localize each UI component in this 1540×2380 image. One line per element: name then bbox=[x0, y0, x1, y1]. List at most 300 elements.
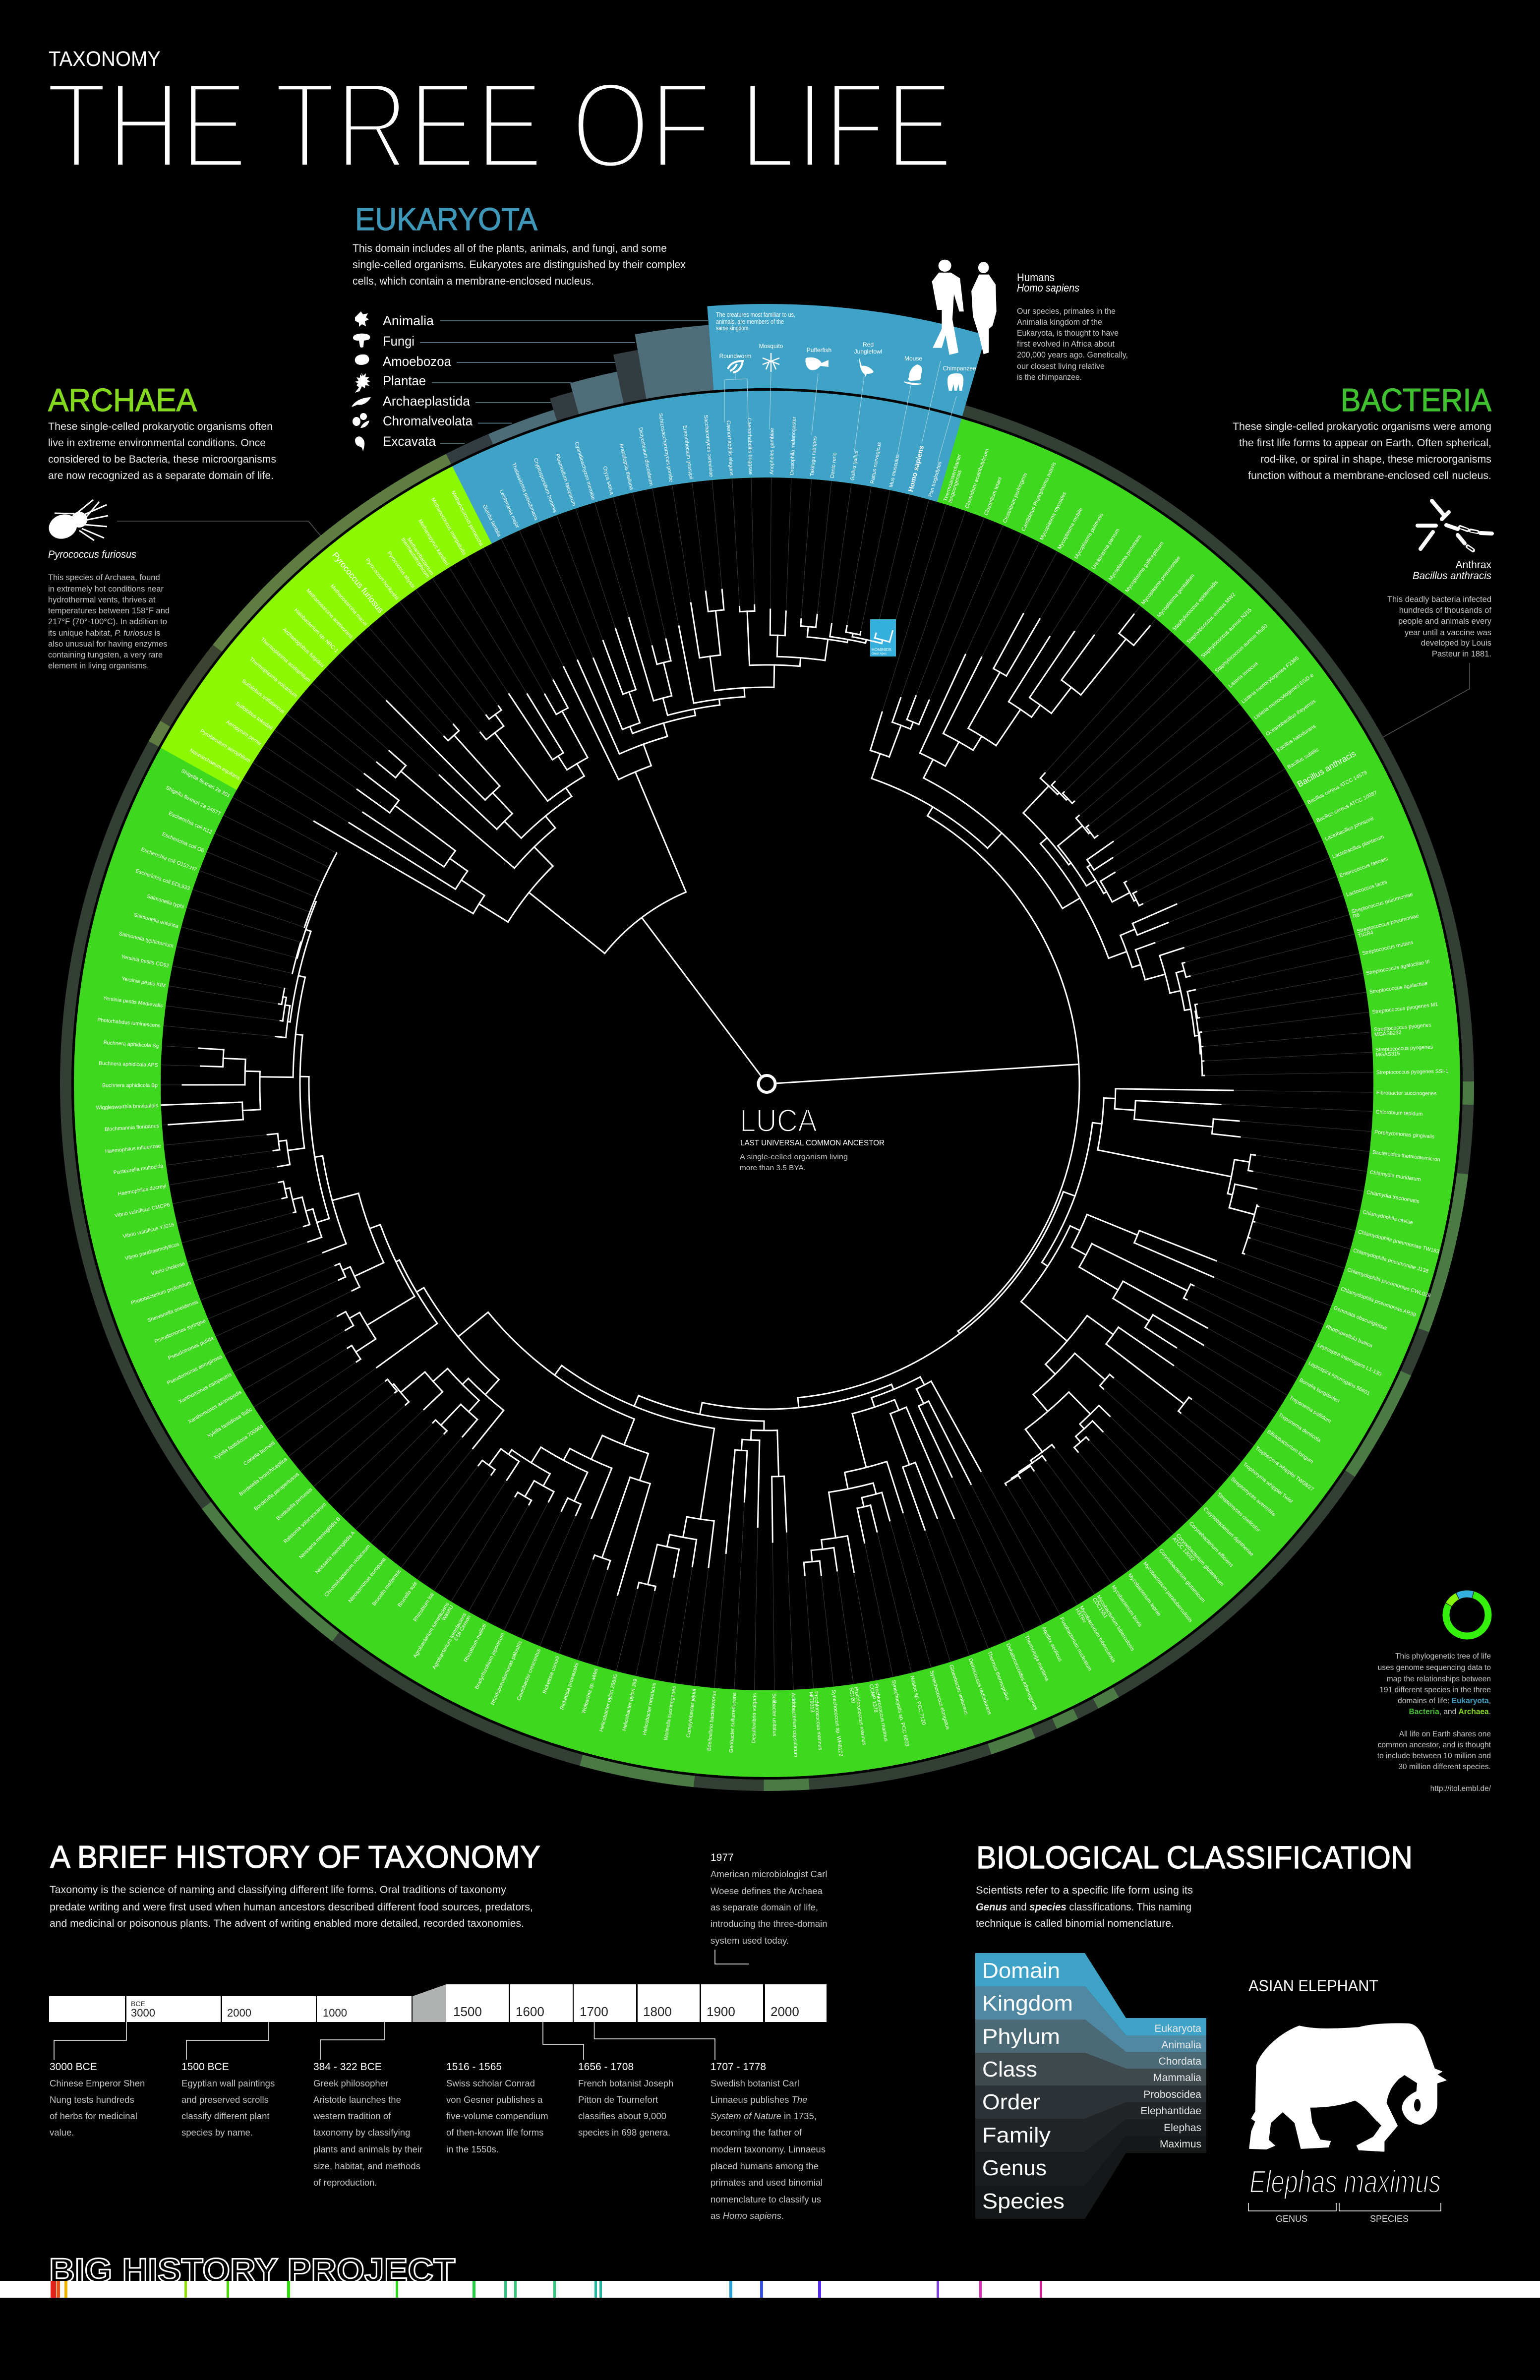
species labels: Listeria monocytogenes F2365 bbox=[1241, 655, 1300, 705]
species labels: Corynebacterium efficiens bbox=[1188, 1521, 1234, 1568]
text: Humans description: is the chimpanzee. bbox=[1017, 372, 1082, 382]
species labels: Treponema pallidum bbox=[1288, 1395, 1332, 1425]
heading: Eukaryota: EUKARYOTA bbox=[355, 201, 537, 237]
event: 1977: introducing the three-domain bbox=[711, 1918, 828, 1929]
species labels: Bacillus cereus ATCC 10987 bbox=[1315, 789, 1378, 824]
icon: Plantae bbox=[355, 372, 370, 393]
event: 1656-1708 bbox=[578, 2061, 673, 2138]
species labels: Bdellovibrio bacteriovorus bbox=[706, 1691, 717, 1751]
species labels: Methanococcus maripaludis bbox=[430, 497, 467, 556]
species labels: Mycobacterium leprae bbox=[1126, 1572, 1162, 1617]
text: Bacteria description: rod-like, or spiral in shape, these microorganisms bbox=[1260, 453, 1491, 465]
event: 384-322 BCE: size, habitat, and methods bbox=[313, 2161, 420, 2171]
species labels: Corynebacterium diphtheriae bbox=[1202, 1506, 1255, 1557]
species labels: Candidatus Phytoplasma asteris bbox=[1020, 461, 1058, 532]
elephant classification labels: Eukaryota bbox=[1154, 2023, 1201, 2034]
text: Pyrococcus description: in extremely hot conditions near bbox=[48, 585, 164, 594]
text: Humans: Humans bbox=[1017, 271, 1055, 284]
species labels: Methanococcus jannaschii bbox=[450, 490, 484, 547]
classification rank labels: Class bbox=[982, 2057, 1037, 2082]
species labels: Wigglesworthia brevipalpis bbox=[96, 1103, 158, 1111]
species labels: Lactobacillus plantarum bbox=[1331, 833, 1385, 860]
text: Anthrax name bbox=[1413, 559, 1491, 582]
event: 1977: 1977 bbox=[711, 1852, 734, 1863]
species labels: Eremothecium gossypii bbox=[682, 425, 694, 479]
leader line: Anthrax bbox=[1373, 663, 1470, 743]
text: history intro: predate writing and were first used when human ancestors described different food sources, predators, bbox=[50, 1901, 533, 1913]
icon: LUCA node bbox=[759, 1075, 775, 1092]
classification rank labels: Domain bbox=[982, 1959, 1060, 1983]
event: 1500 BCE: and preserved scrolls bbox=[181, 2094, 269, 2105]
animal labels: Mouse bbox=[904, 355, 922, 362]
species labels: Listeria monocytogenes EGD-e bbox=[1253, 672, 1315, 721]
species labels: Buchnera aphidicola APS bbox=[99, 1061, 158, 1068]
species labels: Salmonella typhimurium bbox=[118, 931, 174, 949]
species labels: Listeria innocua bbox=[1227, 660, 1259, 689]
species labels: Oceanobacillus iheyensis bbox=[1265, 698, 1317, 737]
text: Asian elephant: ASIAN ELEPHANT bbox=[1248, 1977, 1378, 1995]
event: 1977: Woese defines the Archaea bbox=[711, 1886, 823, 1896]
legend labels: Animalia bbox=[383, 313, 434, 328]
species labels: Archaeoglobus fulgidus bbox=[282, 627, 325, 668]
text: classification intro: Genus and species classifications. This naming bbox=[976, 1902, 1191, 1913]
species labels: Mycoplasma genitalium bbox=[1156, 573, 1196, 619]
event: 1516-1565: Swiss scholar Conrad bbox=[446, 2078, 535, 2088]
text: Animalia note: The creatures most familiar to us, bbox=[716, 311, 795, 318]
species labels: Vibrio parahaemolyticus bbox=[124, 1241, 180, 1262]
text: Anthrax description: developed by Louis bbox=[1421, 639, 1491, 648]
species labels: Corynebacterium glutamicum bbox=[1175, 1533, 1225, 1588]
species labels: Chlamydia trachomatis bbox=[1366, 1190, 1420, 1205]
text: history intro: and medicinal or poisonous plants. The advent of writing enabled more detailed, recorded taxonomies. bbox=[50, 1917, 524, 1929]
icon: mosquito bbox=[763, 353, 779, 372]
text: Humans: Homo sapiens bbox=[1017, 282, 1079, 294]
species labels: Bacillus subtilis bbox=[1287, 747, 1320, 770]
species labels: Streptomyces coelicolor bbox=[1216, 1491, 1261, 1534]
species labels: Saccharomyces cerevisiae bbox=[703, 415, 714, 477]
species labels: Schizosaccharomyces pombe bbox=[657, 413, 674, 482]
text: tree note bbox=[1377, 1652, 1491, 1793]
text: Pyrococcus description: also unusual for having enzymes bbox=[48, 640, 167, 649]
chart: classification ribbons bbox=[975, 1953, 1206, 2219]
species labels: Thermotoga maritima bbox=[1023, 1634, 1050, 1682]
text: Eukaryota description: single-celled organisms. Eukaryotes are distinguished by their complex bbox=[353, 258, 686, 271]
event: 1516-1565 bbox=[446, 2061, 548, 2154]
text: LUCA block bbox=[740, 1103, 885, 1172]
species labels: Synechococcus elongatus bbox=[929, 1670, 951, 1730]
species labels: Porphyromonas gingivalis bbox=[1374, 1129, 1435, 1140]
text: Archaea description bbox=[48, 420, 276, 481]
classification rank labels: Kingdom bbox=[982, 1991, 1073, 2016]
event: 384-322 BCE: of reproduction. bbox=[313, 2177, 377, 2188]
species labels: Yersinia pestis KIM bbox=[121, 976, 166, 989]
species labels: Giardia lamblia bbox=[481, 504, 502, 538]
event: 384-322 BCE bbox=[313, 2061, 422, 2188]
animal labels bbox=[719, 341, 976, 372]
icon: human silhouettes bbox=[932, 260, 997, 355]
species labels: Streptococcus pneumoniae bbox=[1351, 892, 1414, 915]
animal labels: Roundworm bbox=[719, 353, 751, 359]
timeline scale break bbox=[413, 1984, 446, 2022]
species labels: Mycoplasma mycoides bbox=[1039, 491, 1068, 541]
species labels: H37Rv bbox=[1074, 1607, 1087, 1624]
animal labels: Red bbox=[863, 341, 874, 348]
text: Pyrococcus description bbox=[48, 573, 170, 670]
species labels: Mycobacterium paratuberculosis bbox=[1142, 1560, 1193, 1624]
species labels: Photobacterium profundum bbox=[130, 1280, 192, 1306]
text: Pyrococcus description: This species of Archaea, found bbox=[48, 573, 160, 582]
tree branches bbox=[162, 590, 1259, 1595]
species labels: CCMP 1378 bbox=[868, 1684, 879, 1713]
icon: Amoebozoa bbox=[355, 355, 369, 365]
species labels: Streptococcus agalactiae III bbox=[1366, 958, 1430, 976]
text: Humans description: our closest living relative bbox=[1017, 361, 1105, 371]
species labels: Thermoplasma volcanium bbox=[248, 656, 298, 699]
timeline year labels: 1500 bbox=[453, 2004, 482, 2019]
event: 384-322 BCE: Aristotle launches the bbox=[313, 2094, 401, 2105]
event: 1707-1778: 1707 - 1778 bbox=[711, 2061, 766, 2073]
event: 1656-1708: French botanist Joseph bbox=[578, 2078, 673, 2088]
species tip guide lines bbox=[161, 477, 1373, 1690]
species labels: Prochlorococcus marinus bbox=[873, 1683, 889, 1742]
species labels: Drosophila melanogaster bbox=[789, 416, 797, 475]
species labels: Buchnera aphidicola Bp bbox=[102, 1082, 158, 1088]
event: 3000 BCE: value. bbox=[50, 2127, 74, 2138]
binomial brackets bbox=[1248, 2203, 1441, 2211]
text: Humans bbox=[1017, 271, 1079, 294]
species labels: Bacillus cereus ATCC 14579 bbox=[1306, 770, 1368, 806]
species labels: Methanobacterium bbox=[406, 536, 435, 576]
event: 384-322 BCE: 384 - 322 BCE bbox=[313, 2061, 382, 2073]
species labels: Xylella fastidiosa 9a5c bbox=[206, 1406, 253, 1439]
species labels: Thalassiosira pseudonana bbox=[510, 462, 539, 521]
text: Archaea description: are now recognized as a separate domain of life. bbox=[48, 470, 274, 481]
species labels: MGAS8232 bbox=[1374, 1029, 1402, 1038]
species labels: Buchnera aphidicola Sg bbox=[103, 1040, 159, 1049]
event: 384-322 BCE: Greek philosopher bbox=[313, 2078, 388, 2088]
elephant classification labels: Elephas bbox=[1164, 2122, 1201, 2134]
species labels: Mycoplasma gallisepticum bbox=[1124, 540, 1165, 594]
event: 1656-1708: Pitton de Tournefort bbox=[578, 2094, 658, 2105]
text: tree note: uses genome sequencing data to bbox=[1378, 1664, 1491, 1672]
callout: hominids box bbox=[870, 619, 896, 656]
text: Bacteria description: the first life forms to appear on Earth. Often spherical, bbox=[1239, 437, 1491, 449]
species labels: tengcongensis bbox=[947, 470, 963, 504]
species labels: MIT9313 bbox=[808, 1691, 816, 1713]
species labels: Treponema denticola bbox=[1277, 1412, 1322, 1443]
species labels: Vibrio cholerae bbox=[150, 1261, 185, 1277]
species labels: Borrelia burgdorferi bbox=[1299, 1377, 1341, 1404]
species labels: Brucella suis bbox=[397, 1580, 418, 1608]
species labels: Methanopyrus kandleri bbox=[417, 518, 450, 567]
species labels: Mycoplasma mobile bbox=[1057, 507, 1084, 550]
species labels: Desulfovibrio vulgaris bbox=[751, 1693, 758, 1743]
text: Anthrax name: Anthrax bbox=[1456, 559, 1491, 571]
icon: Archaeplastida bbox=[352, 397, 371, 407]
species labels: Methanosarcina acetivorans bbox=[305, 588, 354, 640]
species labels: Rickettsia prowazekii bbox=[559, 1662, 580, 1711]
event: 1977 bbox=[711, 1852, 828, 1946]
species labels: Mycoplasma penetrans bbox=[1108, 534, 1143, 582]
species labels: Haemophilus influenzae bbox=[105, 1143, 161, 1155]
species labels: Prochlorococcus marinus bbox=[853, 1686, 867, 1745]
species labels: Bordetella pertussis bbox=[275, 1487, 314, 1522]
icon: chimpanzee bbox=[948, 373, 963, 391]
event: 1977: American microbiologist Carl bbox=[711, 1869, 827, 1879]
text: Pyrococcus description: containing tungsten, a very rare bbox=[48, 651, 163, 659]
species labels: Chlamydia muridarum bbox=[1369, 1169, 1422, 1183]
event: 3000 BCE: Chinese Emperor Shen bbox=[50, 2078, 145, 2088]
text: Pyrococcus name: Pyrococcus furiosus bbox=[48, 549, 136, 560]
species labels: Rattus norvegicus bbox=[869, 442, 883, 484]
species labels: Chlamydophila pneumoniae TW183 bbox=[1358, 1229, 1440, 1255]
event: 1707-1778: placed humans among the bbox=[711, 2161, 819, 2171]
species labels: Mycoplasma pneumoniae bbox=[1140, 555, 1182, 606]
text: Pyrococcus description: its unique habitat, P. furiosus is bbox=[48, 629, 160, 638]
elephant classification labels: Mammalia bbox=[1153, 2072, 1201, 2083]
species labels: Salmonella enterica bbox=[133, 912, 179, 930]
heading: Bacteria: BACTERIA bbox=[1341, 382, 1492, 418]
elephant classification labels: Chordata bbox=[1159, 2056, 1201, 2067]
species labels: Pyrococcus furiosus bbox=[330, 550, 385, 615]
elephant classification labels: Proboscidea bbox=[1143, 2089, 1201, 2100]
text: Eukaryota description: cells, which contain a membrane-enclosed nucleus. bbox=[353, 275, 594, 287]
species labels: Fusobacterium nucleatum bbox=[1059, 1616, 1093, 1672]
species labels: Aeropyrum pernix bbox=[225, 719, 263, 747]
timeline year labels: 1700 bbox=[580, 2004, 608, 2019]
event: 1500 BCE: species by name. bbox=[181, 2127, 253, 2138]
species labels: Takifugu rubripes bbox=[809, 436, 818, 476]
species labels: Synechocystis sp. PCC 6803 bbox=[890, 1679, 910, 1747]
text: tree note: map the relationships between bbox=[1387, 1675, 1491, 1683]
text: Pyrococcus description: temperatures between 158°F and bbox=[48, 606, 170, 615]
species labels: Mycobacterium bovis bbox=[1110, 1584, 1143, 1628]
species labels: R6 bbox=[1352, 912, 1361, 920]
species labels: Xanthomonas axonopodis bbox=[187, 1389, 242, 1425]
species labels: Chlorobium tepidum bbox=[1375, 1109, 1423, 1117]
event: 1656-1708: 1656 - 1708 bbox=[578, 2061, 634, 2073]
species labels: Solibacter usitatus bbox=[771, 1693, 777, 1736]
species labels: Streptomyces avermitilis bbox=[1230, 1476, 1277, 1517]
classification rank labels: Order bbox=[982, 2090, 1040, 2114]
species labels: Leptospira interrogans 56601 bbox=[1307, 1360, 1371, 1397]
species labels: thermautotrophicum bbox=[400, 537, 431, 579]
species labels: Staphylococcus aureus MW2 bbox=[1185, 592, 1237, 645]
species labels: Bordetella bronchiseptica bbox=[238, 1456, 289, 1497]
text: classification intro: Scientists refer to a specific life form using its bbox=[976, 1885, 1193, 1896]
text: Pyrococcus description: element in living organisms. bbox=[48, 661, 149, 670]
species labels: Yersinia pestis Medievalis bbox=[103, 995, 163, 1009]
species labels: Aquifex aeolicus bbox=[1041, 1626, 1063, 1663]
species labels: Halobacterium sp. NRC-1 bbox=[293, 607, 340, 654]
species labels: Streptococcus pyogenes SSI-1 bbox=[1376, 1069, 1448, 1075]
event: 1656-1708: species in 698 genera. bbox=[578, 2127, 670, 2138]
species labels: Pyrococcus horikoshii bbox=[364, 557, 400, 601]
species labels: Rickettsia conorii bbox=[541, 1655, 561, 1695]
species labels: Escherichia coli O157:H7 bbox=[140, 846, 197, 873]
species labels: Acidobacterium capsulatum bbox=[790, 1693, 799, 1757]
text: Eukaryota description: This domain includes all of the plants, animals, and fungi, and some bbox=[353, 242, 667, 254]
timeline year labels: 2000 bbox=[227, 2007, 251, 2019]
text: binomial name: Elephas maximus bbox=[1249, 2164, 1441, 2200]
animal labels: Mosquito bbox=[759, 343, 783, 350]
domain ring bbox=[0, 200, 1540, 1967]
species labels: Leishmania major bbox=[498, 489, 521, 529]
species labels: Pyrobaculum aerophilum bbox=[199, 728, 252, 764]
species labels: Arabidopsis thaliana bbox=[618, 443, 635, 490]
classification rank labels: Species bbox=[982, 2189, 1065, 2213]
text: Archaea description: considered to be Bacteria, these microorganisms bbox=[48, 453, 276, 465]
elephant classification labels: Maximus bbox=[1160, 2139, 1201, 2150]
legend labels bbox=[383, 313, 473, 449]
text: Archaea description: live in extreme environmental conditions. Once bbox=[48, 437, 266, 449]
species labels: Streptococcus pyogenes bbox=[1375, 1044, 1433, 1053]
footer: Big History Project title: BIG HISTORY PROJECT bbox=[49, 2252, 455, 2289]
text: genus and species captions: GENUS bbox=[1276, 2214, 1307, 2224]
text: tree note: This phylogenetic tree of life bbox=[1395, 1652, 1491, 1661]
species labels: Mycobacterium tuberculosis bbox=[1095, 1594, 1135, 1652]
species labels: Enterococcus faecalis bbox=[1339, 856, 1389, 879]
species labels: Staphylococcus epidermidis bbox=[1171, 580, 1219, 632]
species labels: Clostridium perfringens bbox=[1002, 472, 1028, 524]
species labels: Pyrococcus abyssi bbox=[386, 550, 416, 589]
heading: brief history: A BRIEF HISTORY OF TAXONOMY bbox=[50, 1839, 540, 1875]
species labels: Thermoanaerobacter bbox=[943, 453, 963, 502]
timeline year labels: 3000 bbox=[131, 2007, 155, 2019]
species labels: Neisseria meningitidis A bbox=[314, 1530, 356, 1575]
icon: Animalia bbox=[355, 311, 369, 327]
timeline year labels: 1600 bbox=[516, 2004, 544, 2019]
text: Animalia note: animals, are members of the bbox=[716, 318, 784, 325]
event: 3000 BCE: Nung tests hundreds bbox=[50, 2094, 134, 2105]
species labels: Pseudomonas syringae bbox=[154, 1318, 207, 1345]
chart: domain share donut bbox=[1438, 1586, 1496, 1644]
event: 1707-1778: Swedish botanist Carl bbox=[711, 2078, 799, 2088]
icon: mouse bbox=[904, 365, 922, 384]
timeline year labels: BCE bbox=[131, 2000, 145, 2008]
species labels: Thermoplasma acidophilum bbox=[259, 636, 312, 684]
species labels: Gallus gallus bbox=[849, 450, 859, 481]
species labels: Corynebacterium glutamicum bbox=[1158, 1547, 1206, 1604]
text: Anthrax description: This deadly bacteria infected bbox=[1387, 595, 1491, 604]
species labels: Chlamydophila pneumoniae AR39 bbox=[1340, 1286, 1417, 1318]
text: Humans description: Our species, primates in the bbox=[1017, 306, 1116, 316]
species labels: Synechococcus sp. WH8102 bbox=[830, 1689, 844, 1757]
elephant classification labels bbox=[1140, 2023, 1201, 2150]
event: 384-322 BCE: taxonomy by classifying bbox=[313, 2127, 410, 2138]
text: Anthrax description: hundreds of thousands of bbox=[1399, 606, 1491, 615]
species labels: Geobacter sulfurreducens bbox=[728, 1692, 738, 1753]
text: tree note: 30 million different species. bbox=[1398, 1763, 1491, 1771]
text: Humans description: first evolved in Africa about bbox=[1017, 339, 1115, 349]
event: 1656-1708: classifies about 9,000 bbox=[578, 2111, 666, 2121]
species labels: Ureaplasma parvum bbox=[1090, 528, 1121, 571]
icon: Excavata bbox=[355, 436, 364, 451]
species labels: Agrobacterium tumefaciens bbox=[431, 1612, 468, 1670]
event: 1977: as separate domain of life, bbox=[711, 1902, 818, 1912]
event: 1500 BCE: Egyptian wall paintings bbox=[181, 2078, 275, 2088]
species labels: Dictyostelium discoideum bbox=[637, 427, 654, 486]
text: Anthrax description: Pasteur in 1881. bbox=[1432, 650, 1491, 658]
icon: Chromalveolata bbox=[353, 413, 369, 428]
Animalia wedge content bbox=[716, 311, 976, 463]
species labels: C58 Cereon bbox=[453, 1614, 472, 1642]
species labels: Mycoplasma pulmonis bbox=[1073, 512, 1105, 560]
species labels: Sulfolobus tokodaii bbox=[235, 701, 274, 731]
species labels: Clostridium acetobutylicum bbox=[964, 448, 990, 509]
species labels: Nostoc sp. PCC 7120 bbox=[909, 1675, 927, 1726]
animal labels: Pufferfish bbox=[807, 347, 831, 354]
title: THE TREE OF LIFE bbox=[46, 56, 953, 194]
species labels: Photorhabdus luminescens bbox=[97, 1017, 161, 1029]
species labels: Streptococcus pneumoniae bbox=[1356, 913, 1420, 934]
icon: roundworm bbox=[728, 361, 743, 372]
species labels: Leptospira interrogans L1-130 bbox=[1316, 1342, 1382, 1377]
text: LUCA block: more than 3.5 BYA. bbox=[740, 1164, 806, 1172]
text: genus and species captions: SPECIES bbox=[1370, 2214, 1409, 2224]
text: Animalia note bbox=[716, 311, 795, 332]
text: tree note: http://itol.embl.de/ bbox=[1430, 1785, 1491, 1793]
species labels: Caulobacter crescentus bbox=[516, 1648, 542, 1701]
icon: anthrax bacilli bbox=[1418, 501, 1492, 550]
species labels: Mus musculus bbox=[888, 454, 901, 488]
callout: hominids box: Great Apes bbox=[872, 653, 887, 655]
event: 1516-1565: five-volume compendium bbox=[446, 2111, 548, 2121]
species labels: Tropheryma whipplei TW08/27 bbox=[1254, 1445, 1315, 1492]
species labels: Streptococcus pyogenes M1 bbox=[1372, 1002, 1438, 1015]
text: Pyrococcus description: hydrothermal vents, thrives at bbox=[48, 595, 156, 604]
species labels: TIGR4 bbox=[1358, 930, 1374, 939]
species labels: Escherichia coli O6 bbox=[161, 831, 205, 854]
timeline connectors bbox=[54, 1950, 749, 2060]
text: Humans description: 200,000 years ago. Genetically, bbox=[1017, 350, 1128, 359]
species labels: Pseudomonas putida bbox=[167, 1335, 215, 1361]
species labels: MGAS315 bbox=[1375, 1051, 1400, 1058]
event: 3000 BCE: of herbs for medicinal bbox=[50, 2111, 137, 2121]
species labels: Caenorhabditis briggsae bbox=[746, 417, 754, 475]
species labels: Bordetella parapertussis bbox=[253, 1471, 300, 1512]
event: 1707-1778: System of Nature in 1735, bbox=[711, 2111, 817, 2121]
legend labels: Amoebozoa bbox=[383, 354, 452, 369]
elephant classification labels: Elephantidae bbox=[1140, 2105, 1201, 2117]
event: 1500 BCE: 1500 BCE bbox=[181, 2061, 229, 2073]
text: classification intro bbox=[976, 1885, 1193, 1929]
text: Bacteria description bbox=[1233, 420, 1491, 481]
heading: Archaea: ARCHAEA bbox=[48, 382, 197, 418]
species labels: Lactobacillus johnsonii bbox=[1324, 816, 1374, 842]
event: 384-322 BCE: western tradition of bbox=[313, 2111, 391, 2121]
text: Humans description: Eukaryota, is thought to have bbox=[1017, 328, 1119, 338]
species labels: Fibrobacter succinogenes bbox=[1376, 1090, 1436, 1097]
species labels: Methanosarcina mazei bbox=[329, 583, 368, 627]
animal labels: Junglefowl bbox=[854, 348, 882, 355]
event: 1707-1778: Linnaeus publishes The bbox=[711, 2094, 807, 2105]
timeline bar bbox=[49, 1984, 827, 2022]
text: tree note: All life on Earth shares one bbox=[1399, 1730, 1491, 1738]
text: genus and species captions bbox=[1276, 2214, 1409, 2224]
event: 1516-1565: in the 1550s. bbox=[446, 2144, 499, 2154]
event: 1500 BCE: classify different plant bbox=[181, 2111, 270, 2121]
species labels: Pseudomonas aeruginosa bbox=[166, 1354, 223, 1386]
species labels: Bacillus halodurans bbox=[1276, 723, 1317, 753]
event: 1516-1565: von Gesner publishes a bbox=[446, 2094, 543, 2105]
species labels: Streptococcus pyogenes bbox=[1374, 1022, 1431, 1033]
species labels: Mycobacterium tuberculosis bbox=[1078, 1605, 1117, 1664]
timeline year labels: 1000 bbox=[323, 2007, 347, 2019]
species labels: Agrobacterium tumefaciens bbox=[412, 1602, 450, 1659]
text: classification intro: technique is called binomial nomenclature. bbox=[976, 1918, 1174, 1929]
text: Humans description: Animalia kingdom of the bbox=[1017, 317, 1102, 327]
